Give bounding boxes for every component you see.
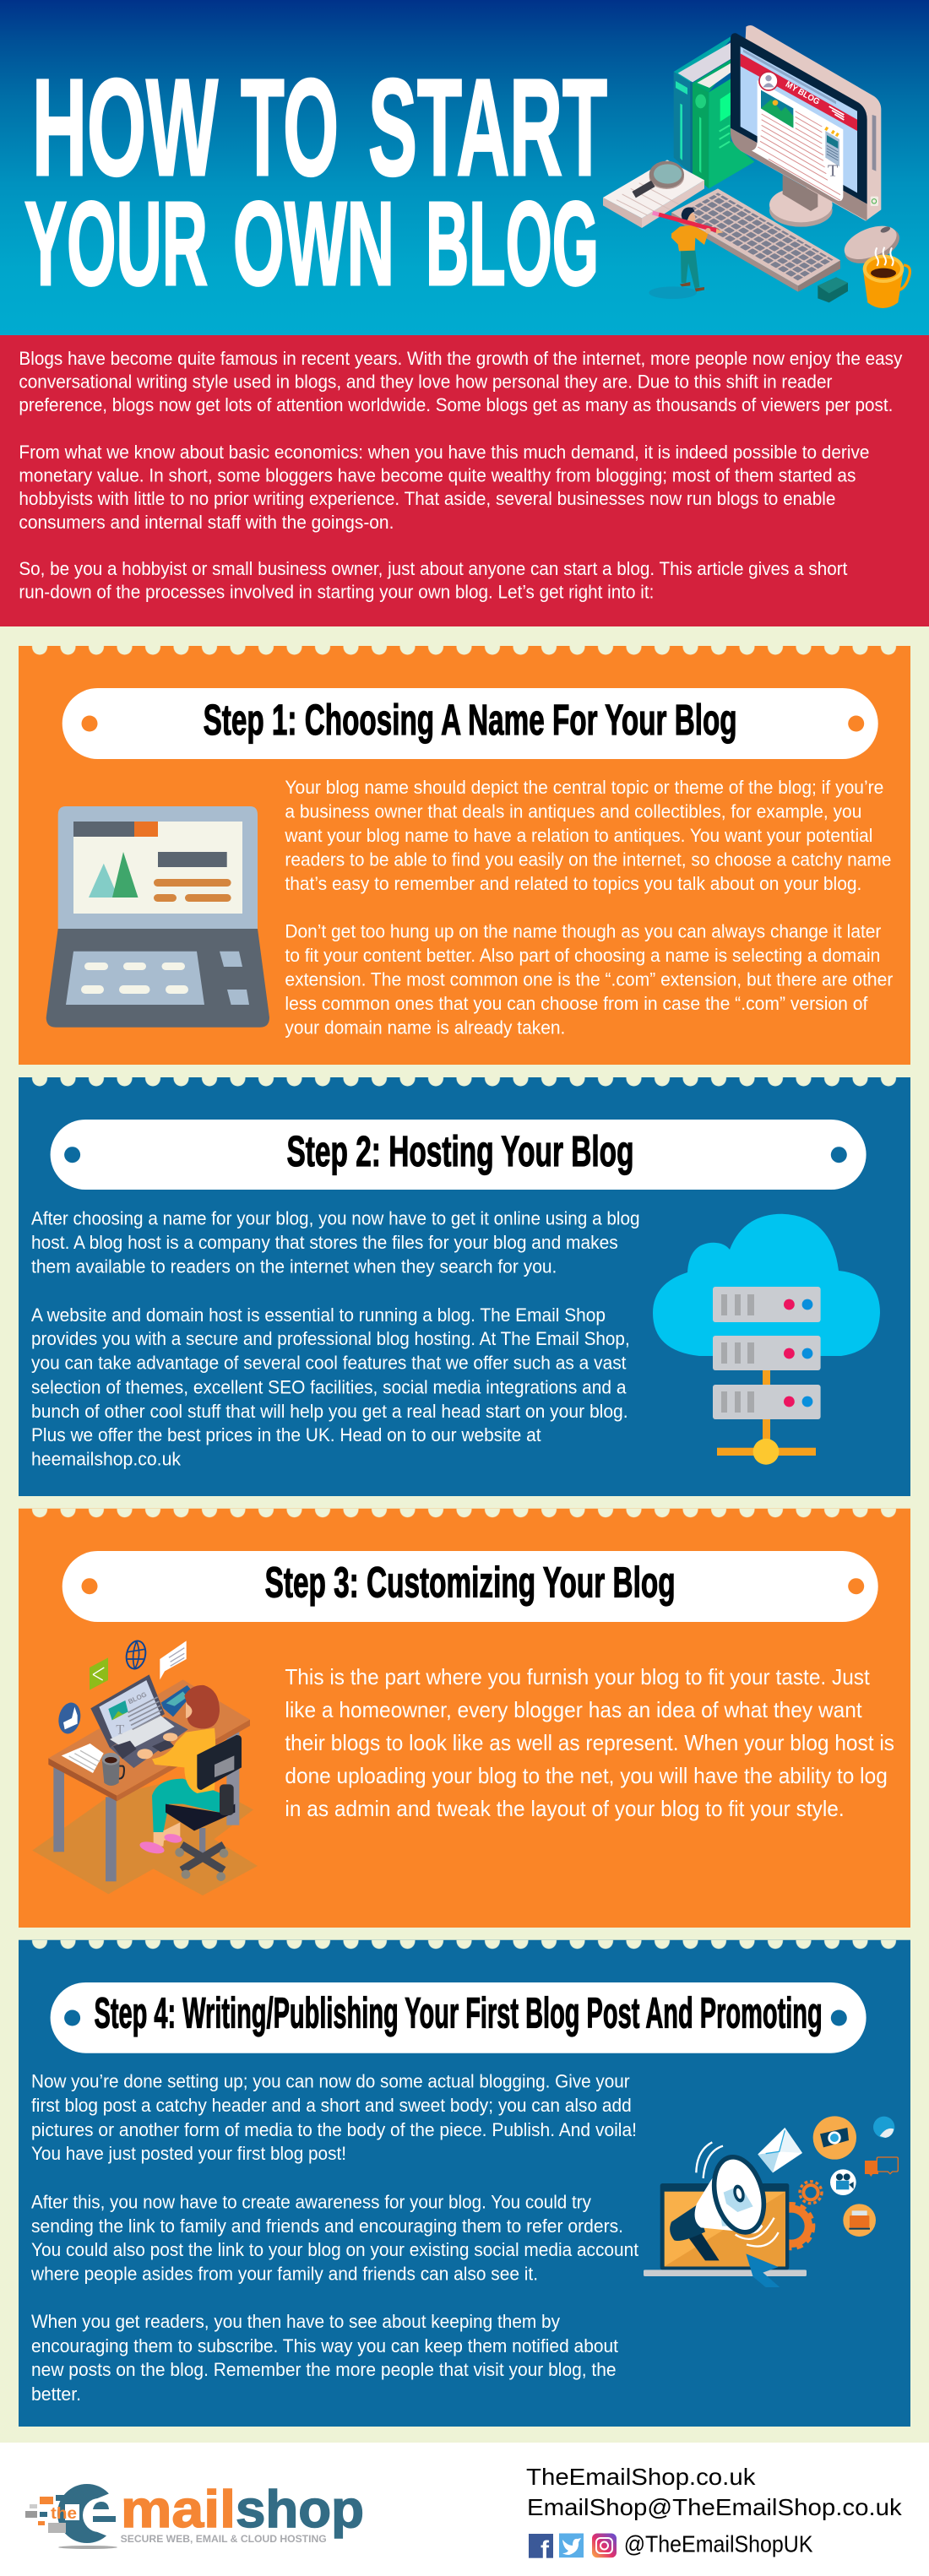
text: step 1 body: to fit your content better. Also part of choosing a name is selecting a domain xyxy=(285,945,880,966)
papers xyxy=(62,1744,104,1773)
heading: step 3: Step 3: Customizing Your Blog xyxy=(265,1559,676,1607)
panel: introduction: Blogs have become quite famous in recent years. With the growth of the internet, more people now enjoy the easy xyxy=(19,348,902,369)
icon: isometric computer desk illustration: T xyxy=(828,161,838,180)
text: step 1 body xyxy=(284,777,893,1039)
panel: step 1 xyxy=(19,646,910,1065)
text: step 2 body: them available to readers on the internet when they search for you. xyxy=(31,1256,557,1277)
envelope xyxy=(758,2128,802,2172)
text: step 3 body: their blogs to look like as well as represent. When your blog host is xyxy=(285,1730,894,1755)
panel: introduction: hobbyists with little to no prior writing experience. That aside, several businesses now run blogs to enable xyxy=(19,488,835,509)
text: step 1 body: less common ones that you can choose from in case the “.com” version of xyxy=(285,993,868,1014)
panel: introduction: run-down of the processes involved in starting your own blog. Let’s get right into it: xyxy=(19,581,654,603)
footer xyxy=(0,2443,929,2576)
icon: megaphone on laptop xyxy=(644,2116,898,2287)
logo: shop xyxy=(236,2481,364,2539)
icon: woman blogging at desk: BLOG xyxy=(127,1690,148,1706)
chair xyxy=(199,1828,205,1856)
panel: introduction: From what we know about basic economics: when you have this much demand, it is indeed possible to derive xyxy=(19,442,869,463)
text: step 4 body: better. xyxy=(31,2383,81,2405)
mouse xyxy=(839,220,905,270)
text: step 1 body: that’s easy to remember and related to topics you talk about on your blog. xyxy=(285,873,861,894)
logo e xyxy=(57,2484,118,2546)
text: step 3 body: in as admin and tweak the layout of your blog to fit your style. xyxy=(285,1796,845,1821)
text: step 3 body xyxy=(285,1664,894,1821)
icon: laptop xyxy=(46,806,269,1028)
contact details: EmailShop@TheEmailShop.co.uk xyxy=(527,2494,903,2520)
mug xyxy=(118,1766,124,1779)
text: step 1 body: extension. The most common one is the “.com” extension, but there are other xyxy=(285,969,893,990)
megaphone xyxy=(688,2231,720,2260)
laptop xyxy=(660,2183,789,2270)
text: step 4 body: You could also post the link to your blog on your existing social media account xyxy=(31,2239,638,2260)
header banner xyxy=(0,0,929,335)
text: step 4 body: encouraging them to subscribe. This way you can keep them notified about xyxy=(31,2335,618,2356)
panel: step 3 xyxy=(19,1509,910,1928)
text: step 1 body: want your blog name to have a relation to antiques. You want your potential xyxy=(284,825,872,846)
text: step 2 body: host. A blog host is a company that stores the files for your blog and makes xyxy=(31,1232,618,1253)
cursor xyxy=(746,2253,780,2287)
icon: isometric computer desk illustration xyxy=(603,25,910,308)
icon: facebook: f xyxy=(541,2536,550,2564)
text: step 1 body: your domain name is already taken. xyxy=(285,1017,565,1039)
text: step 2 body: you can take advantage of several cool features that we offer such as a vast xyxy=(31,1353,627,1374)
panel: introduction: conversational writing style used in blogs, and they love how personal they are. Due to this shift in reader xyxy=(19,371,832,392)
text: step 2 body: Plus we offer the best prices in the UK. Head on to our website at xyxy=(31,1424,541,1445)
icon: instagram xyxy=(592,2533,617,2557)
logo: the xyxy=(51,2505,77,2523)
contact details: TheEmailShop.co.uk xyxy=(526,2464,756,2490)
heading: step 3 xyxy=(62,1551,878,1622)
panel: step 2 xyxy=(19,1077,910,1496)
panel: introduction xyxy=(0,335,929,626)
title: OWN xyxy=(233,176,394,310)
document with magnifier xyxy=(603,198,642,228)
title: START xyxy=(368,50,607,204)
floating icons xyxy=(56,1700,84,1736)
panel: introduction: So, be you a hobbyist or small business owner, just about anyone can start a blog. This article gives a short xyxy=(19,558,847,579)
video icon xyxy=(830,2169,856,2195)
monitor xyxy=(741,25,881,221)
text: step 1 body: a business owner that deals in antiques and collectibles, for example, you xyxy=(285,800,861,822)
paper xyxy=(752,80,843,201)
mug xyxy=(898,265,910,290)
text: step 3 body: This is the part where you furnish your blog to fit your taste. Just xyxy=(285,1664,871,1689)
text: step 3 body: done uploading your blog to the net, you will have the ability to log xyxy=(285,1763,888,1788)
heading: step 2: Step 2: Hosting Your Blog xyxy=(287,1127,633,1175)
text: step 4 body: After this, you now have to create awareness for your blog. You could try xyxy=(31,2192,591,2213)
keyboard xyxy=(671,213,798,292)
icon: twitter xyxy=(559,2533,584,2557)
panel: introduction: consumers and internal staff with the goings-on. xyxy=(19,512,394,533)
text: step 4 body: new posts on the blog. Remember the more people that visit your blog, the xyxy=(31,2359,617,2380)
text: step 2 body: heemailshop.co.uk xyxy=(31,1449,182,1469)
book xyxy=(161,1685,193,1716)
text: step 4 body: pictures or another form of media to the body of the piece. Publish. And voila! xyxy=(31,2119,637,2140)
text: step 2 body: selection of themes, excellent SEO facilities, social media integrations and a xyxy=(31,1376,627,1398)
globe xyxy=(873,2117,894,2138)
icon: facebook xyxy=(529,2534,553,2564)
icon: isometric computer desk illustration: MY BLOG xyxy=(784,80,821,107)
panel: introduction: preference, blogs now get lots of attention worldwide. Some blogs get as many as thousands of viewers per post. xyxy=(19,394,893,415)
text: step 3 body: like a homeowner, every blogger has an idea of what they want xyxy=(285,1697,862,1722)
gears xyxy=(774,2209,808,2243)
figure with pencil xyxy=(681,251,699,289)
icon: woman blogging at desk: T xyxy=(116,1722,124,1737)
logo envelopes xyxy=(25,2495,66,2533)
text: step 4 body: first blog post a catchy header and a short and sweet body; you can also add xyxy=(31,2095,632,2116)
title: BLOG xyxy=(426,176,599,310)
text: step 4 body: Now you’re done setting up; you can now do some actual blogging. Give your xyxy=(31,2071,630,2092)
title: TO xyxy=(241,50,339,204)
icon: woman blogging at desk xyxy=(32,1639,258,1895)
text: step 4 body xyxy=(30,2071,638,2405)
heading: step 4 xyxy=(51,1982,867,2053)
books xyxy=(674,36,731,82)
woman xyxy=(152,1779,220,1832)
text: step 4 body: When you get readers, you then have to see about keeping them by xyxy=(31,2311,560,2332)
text: step 2 body: A website and domain host is essential to running a blog. The Email Shop xyxy=(31,1304,606,1326)
text: step 1 body: Your blog name should depict the central topic or theme of the blog; if you’re xyxy=(285,777,883,798)
camera xyxy=(813,2116,856,2160)
title: YOUR xyxy=(24,176,208,310)
chat bubbles xyxy=(865,2161,878,2177)
text: step 2 body xyxy=(31,1207,640,1469)
logo: SECURE WEB, EMAIL & CLOUD HOSTING xyxy=(121,2535,327,2545)
page background xyxy=(0,626,929,2443)
heading: step 1 xyxy=(62,688,878,759)
laptop xyxy=(110,1716,188,1768)
text: step 4 body: where people asides from your family and friends can also see it. xyxy=(30,2263,538,2285)
panel: step 4 xyxy=(19,1940,910,2427)
text: step 2 body: bunch of other cool stuff that will help you get a real head start on your blog. xyxy=(31,1401,628,1422)
contact details: @TheEmailShopUK xyxy=(624,2531,813,2557)
logo xyxy=(25,2481,364,2549)
title xyxy=(24,50,607,310)
logo: mail xyxy=(121,2481,236,2539)
stand xyxy=(769,194,833,227)
text: step 1 body: Don’t get too hung up on the name though as you can always change it later xyxy=(285,920,881,942)
icon: cloud servers xyxy=(653,1214,880,1465)
panel: introduction: monetary value. In short, some bloggers have become quite wealthy from blogging; most of them started as xyxy=(19,464,856,486)
title: HOW xyxy=(32,50,218,204)
text: step 2 body: After choosing a name for your blog, you now have to get it online using a blog xyxy=(31,1207,640,1229)
text: step 4 body: sending the link to family and friends and encouraging them to refer orders. xyxy=(31,2215,623,2237)
text: step 2 body: provides you with a secure and professional blog hosting. At The Email Shop, xyxy=(31,1328,630,1349)
typewriter icon xyxy=(843,2204,876,2237)
text: step 4 body: You have just posted your first blog post! xyxy=(31,2143,346,2164)
heading: step 2 xyxy=(51,1120,867,1190)
text: step 1 body: readers to be able to find you easily on the internet, so choose a catchy name xyxy=(285,849,891,870)
sharpener xyxy=(818,277,848,302)
contact details xyxy=(526,2464,903,2564)
